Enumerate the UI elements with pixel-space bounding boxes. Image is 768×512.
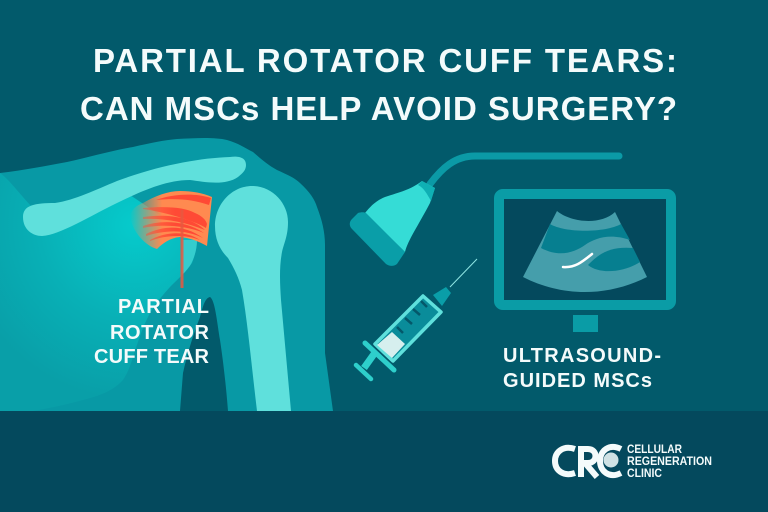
graduations <box>397 301 427 333</box>
syringe <box>356 259 477 379</box>
label: partial rotator cuff tear: PARTIAL <box>118 296 209 318</box>
ultrasound monitor <box>499 194 671 332</box>
needle echo <box>563 254 592 267</box>
logo wordmark: CLINIC <box>627 466 662 480</box>
ultrasound probe <box>350 156 619 266</box>
barrel <box>375 296 441 361</box>
logo <box>555 442 712 480</box>
logo mark CRC <box>555 447 621 477</box>
tissue layer <box>588 248 640 271</box>
monitor stand <box>573 315 598 332</box>
ultrasound fan <box>523 211 647 292</box>
logo wordmark: CELLULAR <box>627 442 682 456</box>
chest glow <box>0 173 197 411</box>
logo dot <box>604 452 618 468</box>
clavicle <box>23 157 246 236</box>
humerus <box>215 186 291 411</box>
screen frame <box>499 194 671 305</box>
label: ultrasound-guided MSCs <box>503 345 661 392</box>
lower tendon patch <box>182 240 197 275</box>
fluid <box>377 332 405 358</box>
logo wordmark <box>627 442 712 480</box>
hub <box>433 287 451 306</box>
probe head <box>365 181 435 252</box>
title: PARTIAL ROTATOR CUFF TEARS: <box>93 42 677 79</box>
title <box>80 42 677 127</box>
label: partial rotator cuff tear <box>94 296 210 368</box>
label: partial rotator cuff tear: CUFF TEAR <box>94 346 210 368</box>
probe lens <box>350 212 405 266</box>
cable <box>430 156 619 184</box>
shoulder body <box>0 138 333 411</box>
torn muscle <box>130 191 212 288</box>
footer band <box>0 411 768 512</box>
title: CAN MSCs HELP AVOID SURGERY? <box>80 90 677 127</box>
label: partial rotator cuff tear: ROTATOR <box>110 322 210 344</box>
logo wordmark: REGENERATION <box>627 454 712 468</box>
shoulder illustration <box>0 138 333 411</box>
label: ultrasound-guided MSCs: ULTRASOUND- <box>503 345 661 367</box>
tissue band <box>541 224 630 253</box>
plunger <box>364 354 374 368</box>
needle <box>450 259 477 287</box>
flange <box>365 343 394 370</box>
probe neck <box>418 181 435 201</box>
armpit <box>180 297 228 411</box>
tear line <box>180 210 184 288</box>
label: ultrasound-guided MSCs: GUIDED MSCs <box>503 370 652 392</box>
plunger end <box>356 365 371 379</box>
